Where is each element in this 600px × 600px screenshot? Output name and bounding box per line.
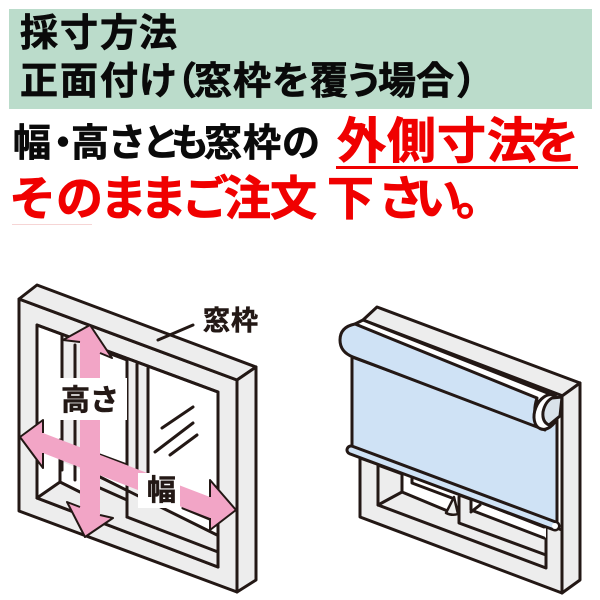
faint line under text (12, 224, 92, 225)
red emphasised text: 外側寸法を (337, 115, 579, 169)
red instruction text: そのままご注文下さい。 (9, 172, 503, 225)
window frame (19, 285, 256, 592)
horizontal arrow: width (20, 420, 236, 530)
label: width (138, 473, 180, 508)
vertical arrow: height (63, 325, 113, 537)
black instruction text: 幅・高さとも窓枠の (13, 123, 320, 165)
window sashes (37, 325, 218, 567)
pull cord weight (446, 497, 458, 515)
panel: heading band (9, 9, 592, 109)
label: height (53, 378, 127, 420)
label: window frame: 窓枠 (203, 306, 258, 336)
headrail (355, 320, 555, 402)
illustration: roller blind on window (340, 307, 580, 593)
illustration: window with measurements (19, 285, 258, 592)
window frame behind blind (360, 307, 580, 593)
blind fabric (352, 357, 557, 523)
bottom bar (351, 450, 558, 529)
red underline (336, 166, 578, 169)
heading line 2: 正面付け（窓枠を覆う場合） (20, 61, 494, 103)
label: height: 高さ (61, 384, 119, 417)
label: width: 幅 (147, 474, 176, 507)
roller end cap (529, 391, 565, 433)
instruction text block (9, 115, 579, 225)
label: window frame (158, 306, 258, 340)
heading line 1: 採寸方法 (20, 13, 177, 55)
roller (340, 324, 545, 430)
